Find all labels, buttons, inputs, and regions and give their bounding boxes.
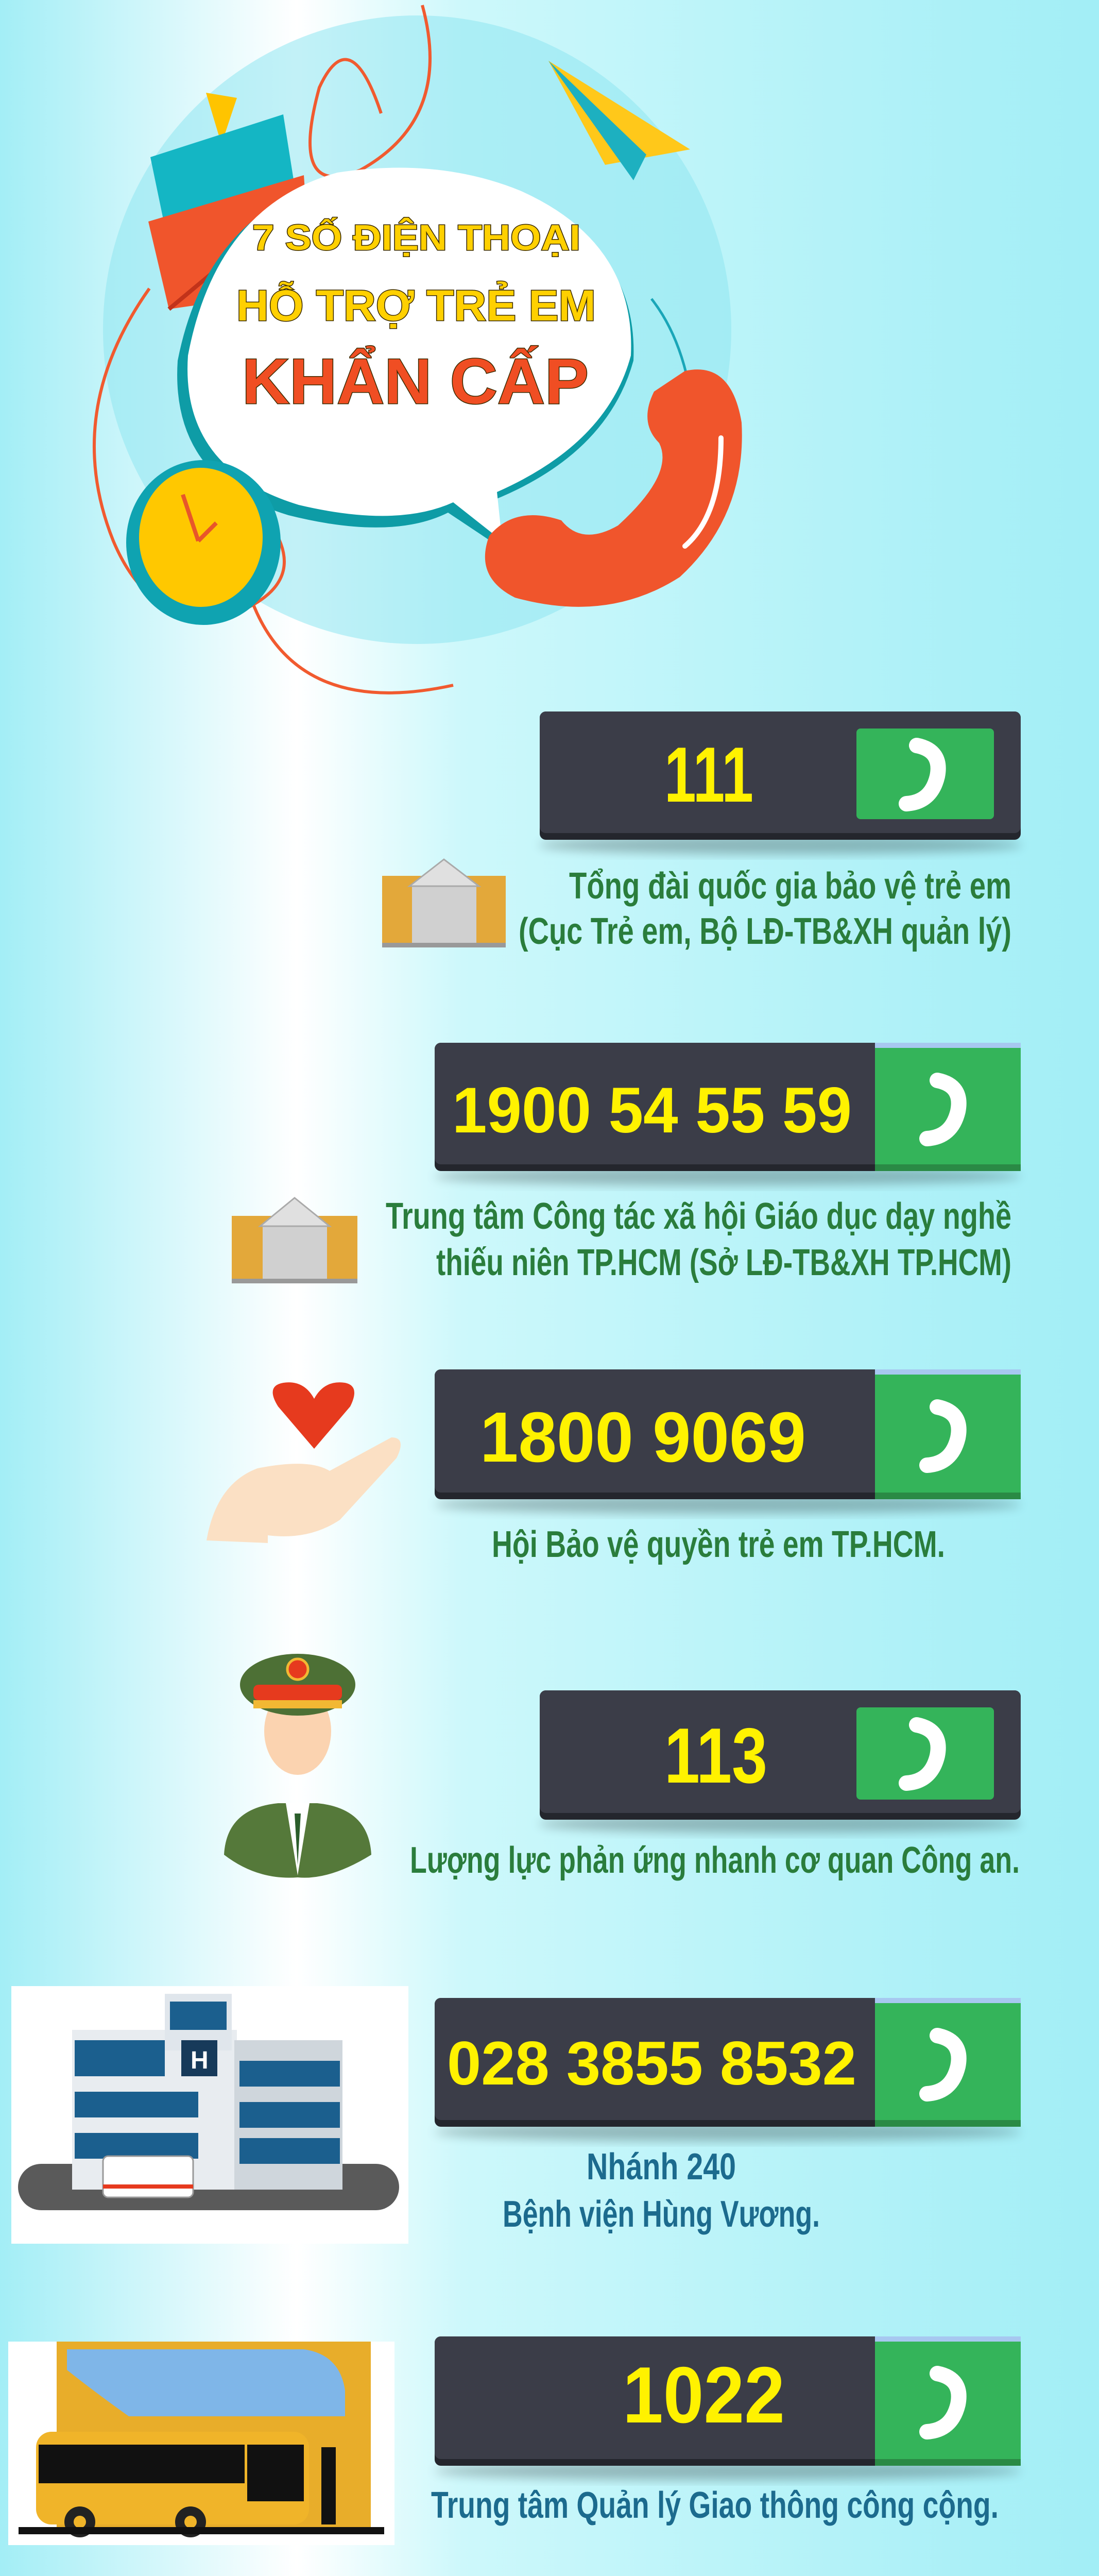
row 1: 111 (538, 711, 1022, 854)
row 1: 111: 111 (664, 731, 753, 819)
title: 7 SỐ ĐIỆN THOẠI (252, 217, 580, 258)
header illustration (94, 5, 742, 693)
icon: building 2 (232, 1198, 357, 1283)
title: HỖ TRỢ TRẺ EM (236, 281, 596, 330)
row 2: 1900 54 55 59 (434, 1043, 1021, 1185)
title: KHẨN CẤP (242, 346, 589, 417)
row 5: 028 3855 8532 (434, 1998, 1021, 2141)
row 6: 1022: 1022 (623, 2350, 785, 2439)
icon: clock (126, 460, 281, 625)
row 2: 1900 54 55 59: 1900 54 55 59 (452, 1075, 852, 1146)
row 3: 1800 9069 (434, 1369, 1021, 1514)
icon: building 1 (382, 859, 506, 947)
row 5: 028 3855 8532: 028 3855 8532 (447, 2029, 856, 2098)
icon: hospital image: H (191, 2047, 209, 2074)
row 4: 113 (538, 1690, 1022, 1833)
text: desc 5 (503, 2146, 820, 2235)
icon: paper plane (548, 61, 690, 180)
icon: envelope (148, 93, 312, 309)
text: desc 5: Nhánh 240 (587, 2146, 736, 2188)
text: desc 1 (519, 866, 1011, 952)
icon: heart and hand 1 (207, 1382, 401, 1543)
title (236, 217, 596, 417)
text: desc 2 (386, 1196, 1011, 1283)
speech bubble (177, 168, 633, 549)
row 6: 1022 (434, 2336, 1021, 2480)
text: desc 5: Bệnh viện Hùng Vương. (503, 2194, 820, 2235)
icon: police officer (224, 1654, 371, 1878)
icon: bus stop image (8, 2342, 394, 2545)
row 3: 1800 9069: 1800 9069 (480, 1398, 806, 1477)
row 4: 113: 113 (664, 1712, 767, 1800)
text: desc 3: Hội Bảo vệ quyền trẻ em TP.HCM. (492, 1524, 945, 1565)
icon: hospital image (11, 1986, 408, 2244)
icon: phone handset (485, 369, 742, 607)
